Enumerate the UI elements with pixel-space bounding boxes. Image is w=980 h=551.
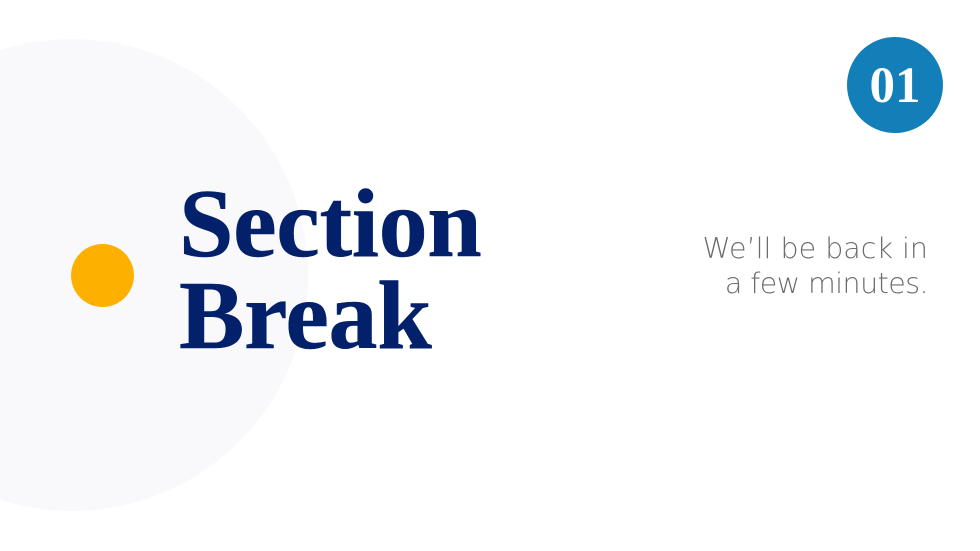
subtitle text: We’ll be back in <box>703 232 928 265</box>
icon: orange dot <box>71 244 134 307</box>
subtitle text <box>703 232 928 300</box>
badge: section number: 01 <box>870 58 920 114</box>
title: Break <box>179 262 431 370</box>
subtitle text: a few minutes. <box>725 267 928 300</box>
background circle <box>0 39 308 511</box>
title <box>179 170 481 370</box>
badge: section number <box>847 37 943 133</box>
title: Section <box>179 170 481 278</box>
